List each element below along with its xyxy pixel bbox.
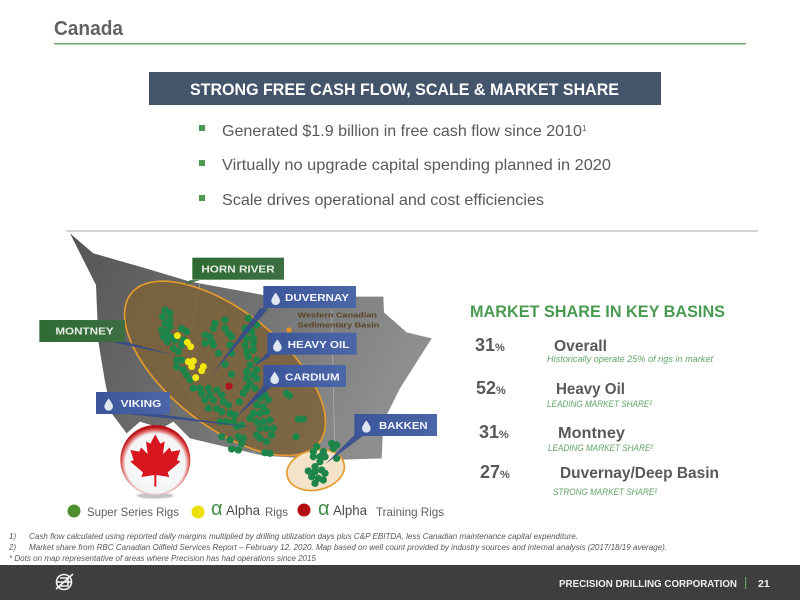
label: Cardium: CARDIUM bbox=[285, 372, 340, 383]
market share heading: MARKET SHARE IN KEY BASINS bbox=[470, 302, 725, 321]
row: montney: 31% bbox=[479, 422, 509, 442]
footer bar bbox=[0, 565, 800, 600]
bullet list bbox=[199, 123, 611, 209]
bullet list: Scale drives operational and cost efficiencies bbox=[222, 192, 544, 209]
icon: Canadian flag ball bbox=[120, 425, 190, 499]
legend: Super Series Rigs bbox=[87, 505, 179, 519]
label: Montney bbox=[39, 320, 125, 342]
label: Horn River bbox=[192, 258, 284, 280]
banner: strong free cash flow: STRONG FREE CASH FLOW, SCALE & MARKET SHARE bbox=[190, 80, 619, 99]
row: overall: Historically operate 25% of rigs in market bbox=[547, 354, 713, 364]
label: Viking bbox=[96, 392, 170, 414]
yellow Alpha rig dots bbox=[177, 336, 203, 378]
row: overall: 31% bbox=[475, 335, 505, 355]
row: heavy oil bbox=[476, 378, 653, 409]
footnotes: 1) bbox=[9, 532, 16, 541]
label: Viking: VIKING bbox=[121, 399, 161, 410]
footnotes bbox=[8, 532, 667, 563]
footnotes: 2) bbox=[8, 543, 16, 552]
legend: Rigs bbox=[265, 505, 288, 519]
bullet list: Generated $1.9 billion in free cash flow since 2010 bbox=[222, 123, 582, 140]
footer bar: PRECISION DRILLING CORPORATION bbox=[559, 578, 737, 590]
label: Bakken bbox=[354, 414, 437, 436]
label: Montney: MONTNEY bbox=[55, 326, 114, 337]
bullet list: Virtually no upgrade capital spending planned in 2020 bbox=[222, 157, 611, 174]
Western Canadian Sedimentary Basin label: Western Canadian bbox=[298, 313, 377, 320]
label: Cardium bbox=[263, 365, 346, 387]
row: overall: Overall bbox=[554, 338, 607, 355]
title: Canada bbox=[54, 18, 124, 40]
label: Heavy Oil bbox=[267, 333, 357, 355]
Western Canadian Sedimentary Basin label: Sedimentary Basin bbox=[298, 323, 379, 330]
icon: company logo bbox=[56, 574, 73, 590]
legend bbox=[68, 498, 444, 520]
legend: Alpha bbox=[226, 502, 260, 518]
row: duvernay bbox=[480, 462, 719, 497]
Western Canadian Sedimentary Basin label bbox=[286, 313, 379, 333]
row: duvernay: Duvernay/Deep Basin bbox=[560, 465, 719, 482]
label pointers bbox=[113, 280, 363, 464]
red Alpha training rig dot bbox=[225, 383, 233, 390]
label: Duvernay: DUVERNAY bbox=[285, 293, 350, 304]
basin ellipse bbox=[95, 249, 355, 488]
banner: strong free cash flow bbox=[149, 72, 661, 105]
row: montney: LEADING MARKET SHARE² bbox=[548, 443, 654, 453]
row: heavy oil: LEADING MARKET SHARE² bbox=[547, 399, 653, 409]
footer bar: 21 bbox=[758, 578, 770, 590]
row: heavy oil: Heavy Oil bbox=[556, 381, 625, 398]
footnotes: Market share from RBC Canadian Oilfield Services Report – February 12, 2020. Map based on well count provided by industry sources and internal analysis (2017/18/19 average). bbox=[29, 543, 667, 552]
footnotes: Cash flow calculated using reported daily margins multiplied by drilling utilization days plus C&P EBITDA, less Canadian maintenance capital expenditure. bbox=[29, 532, 578, 541]
label: Bakken: BAKKEN bbox=[379, 421, 428, 432]
Bakken ellipse bbox=[283, 444, 348, 496]
row: overall bbox=[475, 335, 713, 364]
legend: Alpha bbox=[333, 502, 367, 518]
row: duvernay: 27% bbox=[480, 462, 510, 482]
legend: α bbox=[318, 498, 330, 520]
footnotes: * Dots on map representative of areas where Precision has had operations since 2015 bbox=[9, 554, 317, 563]
label: Heavy Oil: HEAVY OIL bbox=[288, 340, 349, 351]
landmass bbox=[70, 233, 432, 460]
market share panel bbox=[470, 302, 725, 497]
label: Duvernay bbox=[263, 286, 356, 308]
row: montney bbox=[479, 422, 654, 453]
green rig dots bbox=[162, 310, 337, 483]
row: heavy oil: 52% bbox=[476, 378, 506, 398]
label: Horn River: HORN RIVER bbox=[201, 265, 275, 276]
province borders bbox=[177, 283, 335, 458]
row: montney: Montney bbox=[558, 425, 625, 442]
legend: α bbox=[211, 498, 223, 520]
row: duvernay: STRONG MARKET SHARE² bbox=[553, 487, 658, 497]
bullet list: 1 bbox=[582, 124, 587, 133]
legend: Training Rigs bbox=[376, 505, 444, 519]
map of western Canada bbox=[39, 233, 437, 499]
